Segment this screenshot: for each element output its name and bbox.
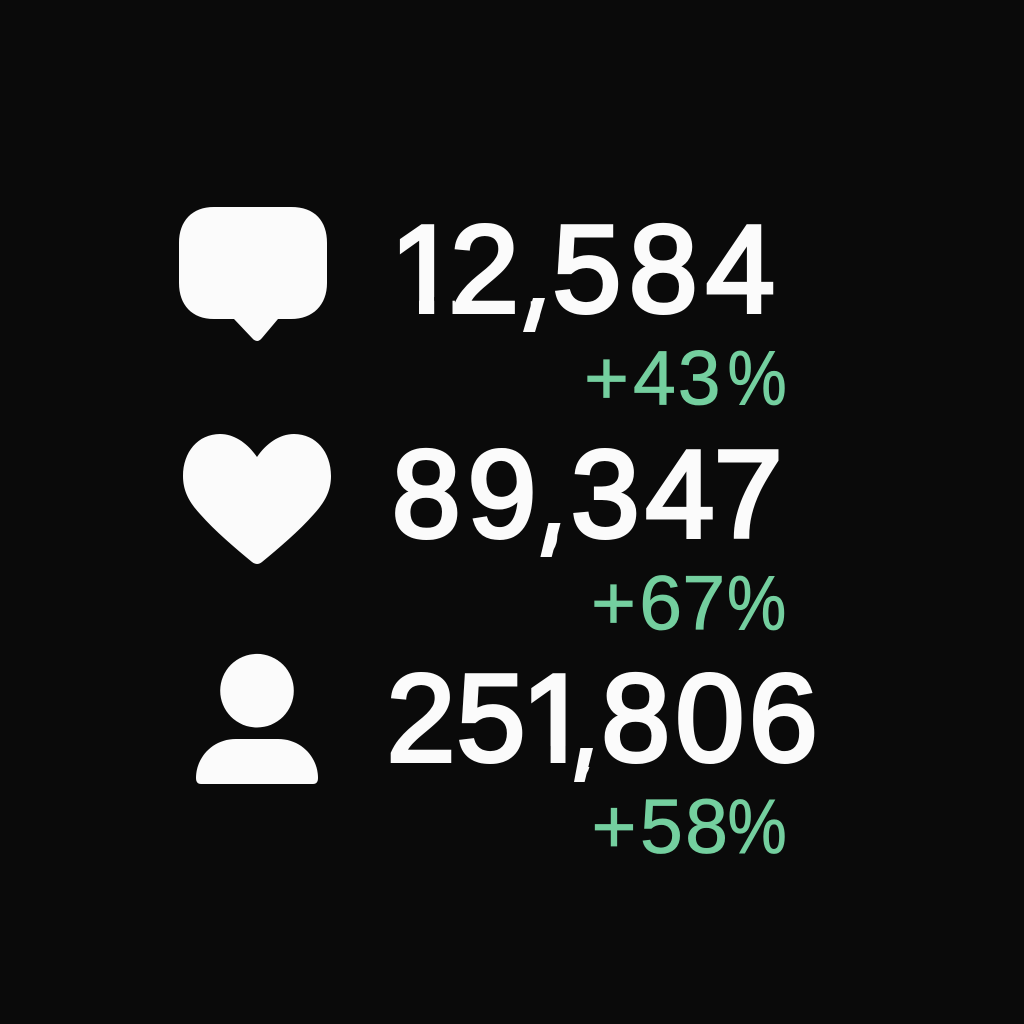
icon: speech bubble xyxy=(179,207,327,341)
followers change xyxy=(592,784,787,870)
icon: person xyxy=(196,654,318,784)
comments change xyxy=(584,336,787,422)
row: comments xyxy=(179,201,787,422)
likes count: 89,347 xyxy=(392,426,783,564)
comments count: 12,584 xyxy=(390,201,775,339)
row: followers xyxy=(196,650,818,870)
comments change: +43 xyxy=(584,336,721,422)
followers change: % xyxy=(728,785,787,870)
followers count: 251,806 xyxy=(386,650,818,788)
likes change: +67 xyxy=(591,560,725,646)
followers change: +58 xyxy=(592,784,728,870)
likes change xyxy=(591,560,786,647)
row: likes xyxy=(183,426,786,647)
comments change: % xyxy=(728,336,787,422)
icon: heart xyxy=(183,434,331,564)
likes change: % xyxy=(727,561,786,647)
